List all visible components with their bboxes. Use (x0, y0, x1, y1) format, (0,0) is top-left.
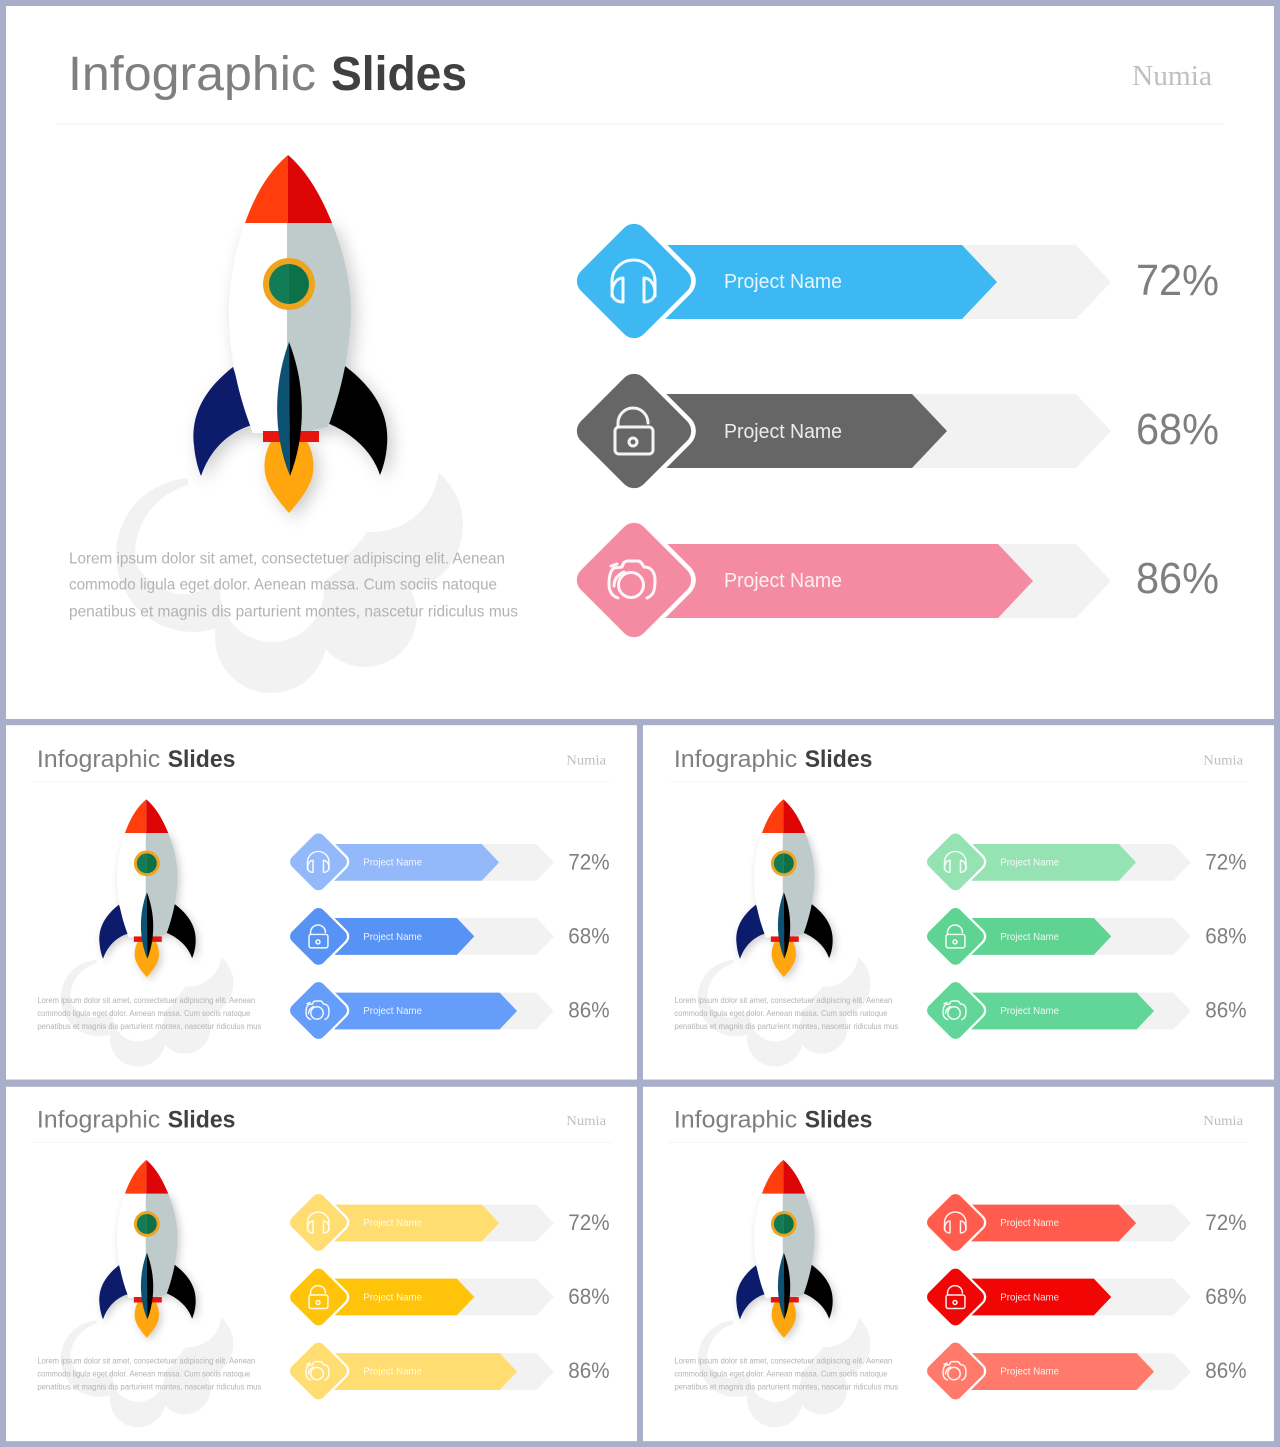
progress row: 68%: 68% (568, 923, 610, 948)
progress row: 68% (921, 1263, 1247, 1331)
icon: rocket (736, 799, 833, 977)
progress row: 86% (565, 511, 1219, 649)
progress row: 68%: 68% (1205, 923, 1247, 948)
description text (37, 996, 261, 1031)
description text: penatibus et magnis dis parturient montes, nascetur ridiculus mus (69, 604, 518, 620)
progress row: 72%: 72% (1205, 849, 1247, 874)
description text: Lorem ipsum dolor sit amet, consectetuer adipiscing elit. Aenean (37, 1357, 255, 1366)
progress row: 72%: 72% (1136, 256, 1219, 305)
progress row: 86%: Project Name (724, 570, 842, 592)
description text (674, 1357, 898, 1391)
smoke cloud (61, 1273, 233, 1427)
progress row: 72%: 72% (1205, 1210, 1247, 1235)
progress row: 68%: 68% (1136, 405, 1219, 454)
progress row: 86%: Project Name (1000, 1006, 1059, 1017)
progress row: 68% (284, 902, 610, 971)
smoke cloud (698, 1273, 870, 1427)
smoke cloud (698, 913, 870, 1067)
description text: penatibus et magnis dis parturient montes, nascetur ridiculus mus (674, 1382, 898, 1391)
title (37, 746, 235, 773)
progress row: 72%: 72% (568, 849, 610, 874)
smoke cloud (61, 913, 233, 1067)
panel: yellow slide (6, 1087, 637, 1441)
progress row: 86% (284, 976, 610, 1045)
progress row: 86%: 86% (568, 1358, 610, 1383)
title: Infographic (674, 746, 797, 773)
icon: rocket (99, 1160, 196, 1338)
progress row: 68%: Project Name (363, 932, 422, 943)
description text: commodo ligula eget dolor. Aenean massa. Cum sociis natoque (37, 1370, 251, 1379)
icon: rocket (736, 1160, 833, 1338)
description text: Lorem ipsum dolor sit amet, consectetuer adipiscing elit. Aenean (69, 550, 505, 568)
brand name: Numia (1203, 753, 1243, 768)
progress row: 86% (921, 1337, 1247, 1406)
title: Infographic (68, 48, 316, 101)
progress row: 86%: 86% (568, 997, 610, 1022)
description text: commodo ligula eget dolor. Aenean massa. Cum sociis natoque (69, 576, 497, 594)
progress row: 72% (284, 827, 610, 896)
progress row: 86%: 86% (1205, 1358, 1247, 1383)
icon: rocket (193, 155, 387, 513)
description text (674, 996, 898, 1031)
panel: red slide (643, 1087, 1274, 1441)
progress row: 86%: 86% (1136, 554, 1219, 603)
progress row: 72%: Project Name (363, 857, 422, 868)
progress row: 68%: 68% (1205, 1284, 1247, 1309)
brand name: Numia (566, 753, 606, 768)
progress row: 72%: Project Name (1000, 1218, 1059, 1229)
progress row: 86%: Project Name (363, 1006, 422, 1017)
description text (37, 1357, 261, 1391)
progress row: 68%: 68% (568, 1284, 610, 1309)
description text: Lorem ipsum dolor sit amet, consectetuer adipiscing elit. Aenean (674, 996, 892, 1005)
description text: penatibus et magnis dis parturient montes, nascetur ridiculus mus (37, 1382, 261, 1391)
progress row: 86% (921, 976, 1247, 1045)
title (37, 1107, 235, 1134)
title: Slides (168, 1107, 235, 1134)
progress row: 72%: Project Name (724, 271, 842, 293)
progress row: 68%: Project Name (724, 421, 842, 443)
title: Infographic (37, 746, 160, 773)
progress row: 72% (921, 827, 1247, 896)
title (674, 746, 872, 773)
icon: rocket (99, 799, 196, 977)
title (674, 1107, 872, 1134)
progress row: 68%: Project Name (1000, 932, 1059, 943)
description text: penatibus et magnis dis parturient montes, nascetur ridiculus mus (37, 1022, 261, 1031)
title: Infographic (674, 1107, 797, 1134)
description text: penatibus et magnis dis parturient montes, nascetur ridiculus mus (674, 1022, 898, 1031)
title: Infographic (37, 1107, 160, 1134)
progress row: 72% (284, 1188, 610, 1257)
description text: Lorem ipsum dolor sit amet, consectetuer adipiscing elit. Aenean (37, 996, 255, 1005)
progress row: 72%: 72% (568, 1210, 610, 1235)
title: Slides (331, 48, 467, 101)
progress row: 68% (921, 902, 1247, 971)
description text: commodo ligula eget dolor. Aenean massa. Cum sociis natoque (37, 1009, 251, 1018)
brand name: Numia (1203, 1114, 1243, 1129)
progress row: 86%: Project Name (1000, 1367, 1059, 1378)
progress row: 72%: Project Name (363, 1218, 422, 1229)
progress row: 86%: Project Name (363, 1367, 422, 1378)
progress row: 86%: 86% (1205, 997, 1247, 1022)
progress row: 68%: Project Name (1000, 1293, 1059, 1304)
progress row: 72%: Project Name (1000, 857, 1059, 868)
title: Slides (805, 1107, 872, 1134)
description text: Lorem ipsum dolor sit amet, consectetuer adipiscing elit. Aenean (674, 1357, 892, 1366)
description text: commodo ligula eget dolor. Aenean massa. Cum sociis natoque (674, 1009, 888, 1018)
progress row: 72% (921, 1188, 1247, 1257)
panel: main slide, cyan grey pink (6, 6, 1274, 719)
panel: blue slide (6, 725, 637, 1080)
description text: commodo ligula eget dolor. Aenean massa. Cum sociis natoque (674, 1370, 888, 1379)
title: Slides (805, 746, 872, 773)
progress row: 72% (565, 212, 1219, 350)
progress row: 68% (565, 362, 1219, 500)
smoke cloud (116, 383, 463, 693)
title: Slides (168, 746, 235, 773)
title (68, 48, 467, 101)
brand name: Numia (1132, 61, 1213, 92)
progress row: 86% (284, 1337, 610, 1406)
progress row: 68%: Project Name (363, 1293, 422, 1304)
brand name: Numia (566, 1114, 606, 1129)
progress row: 68% (284, 1263, 610, 1331)
description text (69, 550, 518, 620)
panel: green slide (643, 725, 1274, 1080)
